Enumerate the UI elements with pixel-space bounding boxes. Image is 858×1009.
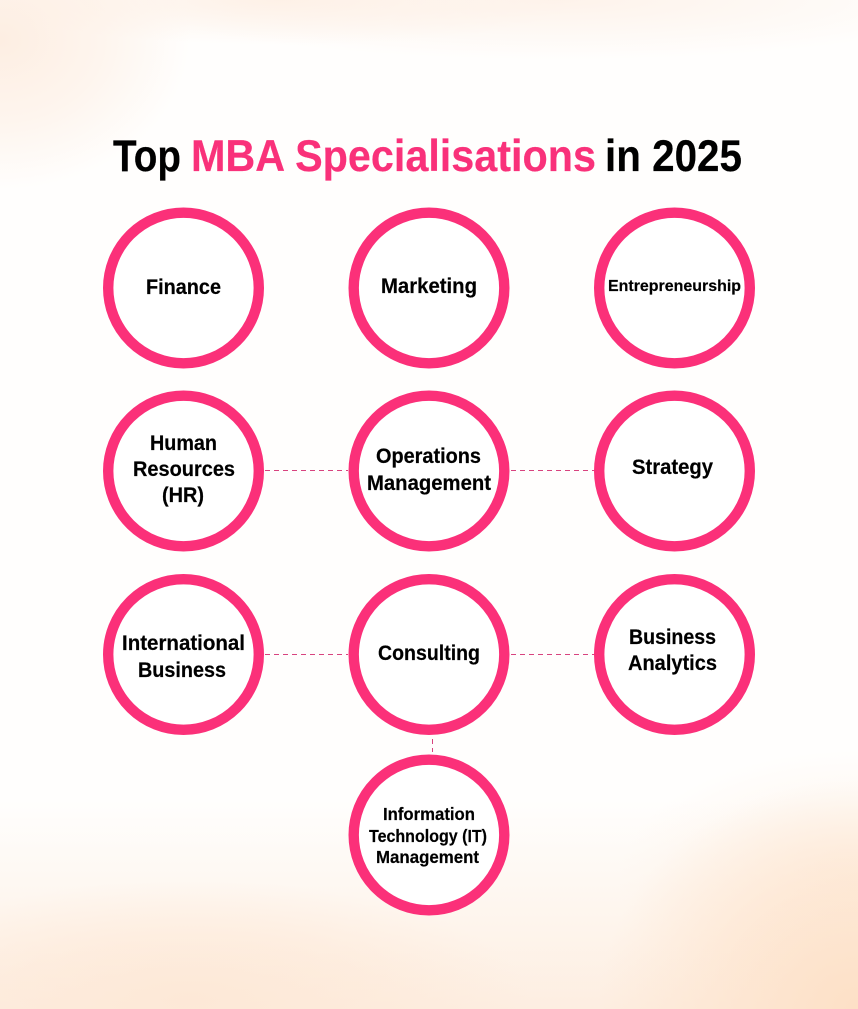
circle: Marketing bbox=[354, 213, 504, 363]
circle: Entrepreneurship bbox=[599, 213, 750, 363]
circle: Human Resources (HR): (HR) bbox=[162, 484, 204, 507]
circle: International Business: International bbox=[122, 632, 245, 655]
circle: Operations Management: Operations bbox=[376, 445, 481, 468]
circle: Information Technology (IT) Management: Management bbox=[376, 847, 479, 867]
circle: Finance bbox=[108, 213, 259, 363]
circle: Consulting bbox=[354, 579, 504, 730]
circle: International Business: Business bbox=[138, 659, 226, 682]
circle: Business Analytics: Analytics bbox=[628, 652, 717, 675]
circle: Business Analytics: Business bbox=[629, 626, 716, 649]
circle: Operations Management: Management bbox=[367, 472, 491, 495]
title: in 2025 bbox=[605, 132, 742, 181]
title bbox=[113, 132, 742, 181]
circle: Human Resources (HR): Resources bbox=[133, 458, 235, 481]
circle: Strategy bbox=[599, 396, 750, 546]
circle: Finance: Finance bbox=[146, 276, 221, 299]
circle: Consulting: Consulting bbox=[378, 642, 480, 665]
circle: Marketing: Marketing bbox=[381, 275, 477, 298]
circle: Strategy: Strategy bbox=[632, 456, 713, 479]
circle: Human Resources (HR): Human bbox=[150, 432, 217, 455]
dashed connectors bbox=[265, 470, 594, 752]
title: Top bbox=[113, 132, 181, 181]
circle: Information Technology (IT) Management: Technology (IT) bbox=[369, 826, 487, 846]
circle: Entrepreneurship: Entrepreneurship bbox=[608, 278, 741, 295]
circle: Information Technology (IT) Management bbox=[354, 760, 504, 910]
title: MBA Specialisations bbox=[191, 132, 596, 181]
circle: Human Resources (HR) bbox=[108, 396, 259, 546]
circle: International Business bbox=[108, 579, 259, 730]
circle: Information Technology (IT) Management: Information bbox=[383, 804, 475, 824]
circle: Operations Management bbox=[354, 396, 504, 546]
circle: Business Analytics bbox=[599, 579, 750, 730]
